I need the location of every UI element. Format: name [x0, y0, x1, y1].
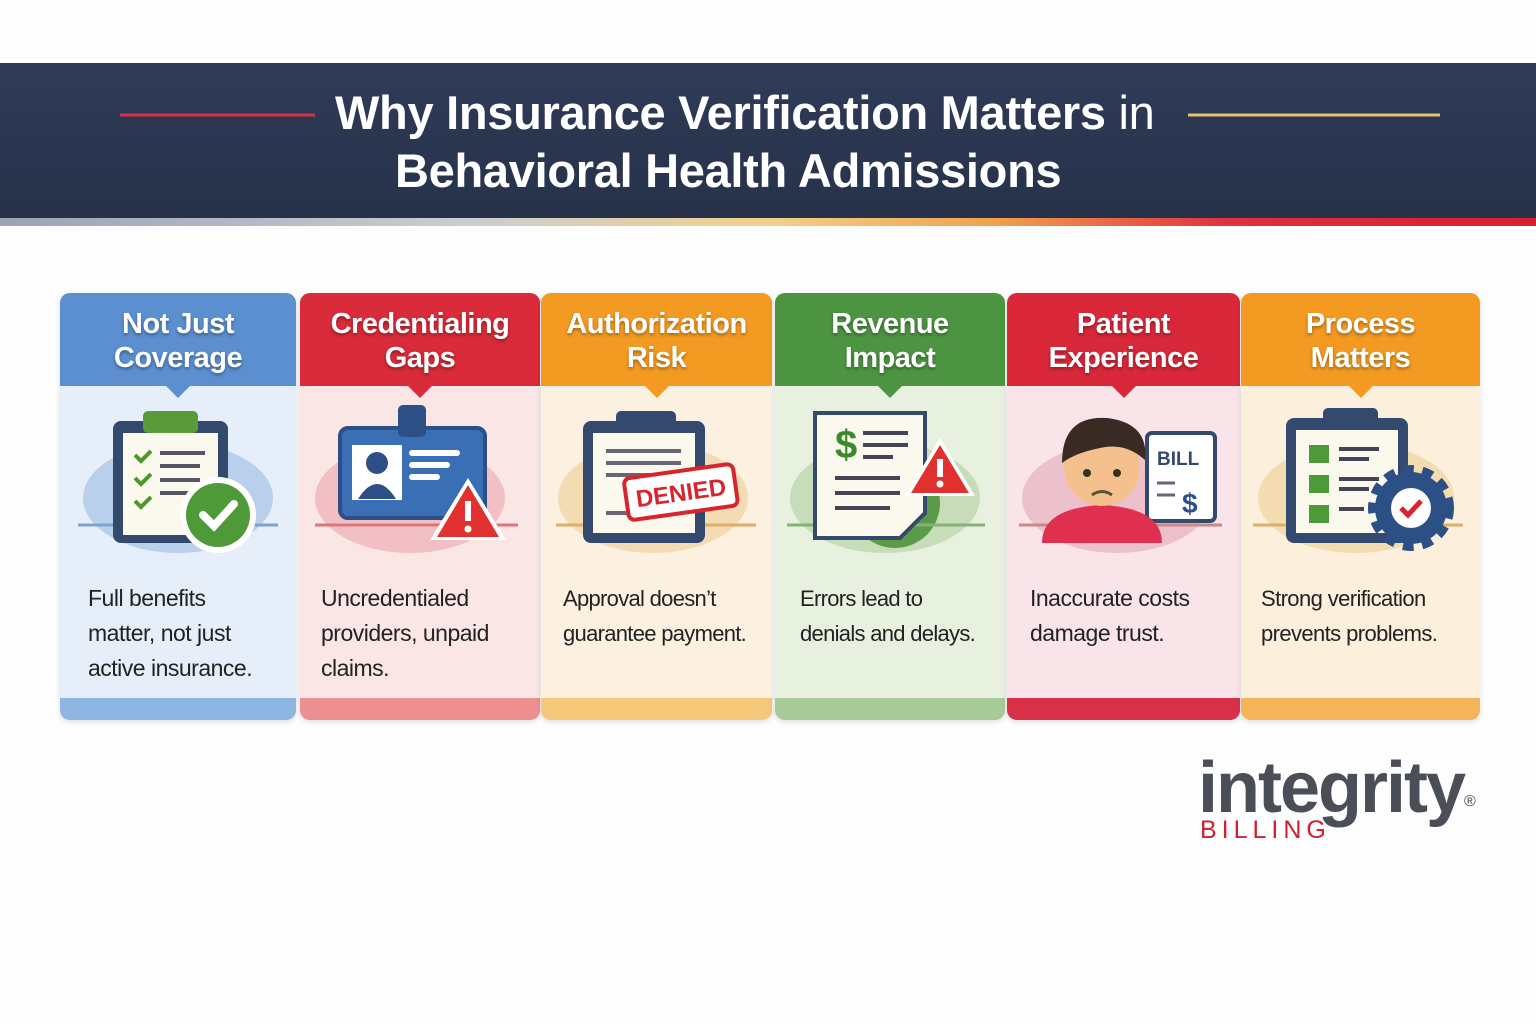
heading: Gaps — [385, 342, 455, 374]
heading — [541, 293, 772, 386]
title: Why Insurance Verification Matters in — [335, 86, 1154, 139]
text: denials and delays. — [800, 621, 975, 646]
text: Approval doesn’t — [563, 586, 716, 611]
text: Errors lead to — [800, 586, 922, 611]
panel: process matters — [1241, 293, 1480, 720]
icon: clipboard check — [78, 411, 278, 553]
text: Strong verification — [1261, 586, 1426, 611]
text: providers, unpaid — [321, 620, 489, 646]
text: prevents problems. — [1261, 621, 1437, 646]
heading: Patient — [1077, 308, 1170, 340]
text: Full benefits — [88, 585, 206, 611]
panel: revenue impact — [775, 293, 1005, 720]
panel: patient experience — [1007, 293, 1240, 720]
heading: Credentialing — [331, 308, 509, 340]
text: active insurance. — [88, 655, 252, 681]
icon: invoice warning: $ — [835, 423, 857, 467]
icon: checklist gear — [1253, 408, 1463, 553]
heading: Risk — [627, 342, 686, 374]
logo: integrity billing: integrity® — [1198, 748, 1474, 828]
title banner — [0, 63, 1536, 226]
text — [1030, 585, 1190, 646]
icon: patient with bill: BILL — [1157, 449, 1200, 470]
heading — [1241, 293, 1480, 386]
icon: clipboard denied — [556, 411, 756, 553]
heading — [775, 293, 1005, 386]
text — [88, 585, 252, 681]
icon: id badge warning — [315, 405, 518, 553]
heading — [60, 293, 296, 386]
heading: Experience — [1049, 342, 1198, 374]
decorative title lines — [120, 114, 1440, 116]
panel: credentialing gaps — [300, 293, 540, 720]
heading: Coverage — [114, 342, 242, 374]
heading: Revenue — [831, 308, 949, 340]
heading: Not Just — [122, 308, 234, 340]
heading: Matters — [1311, 342, 1410, 374]
text: Uncredentialed — [321, 585, 469, 611]
panel: authorization risk — [541, 293, 772, 720]
heading: Impact — [845, 342, 935, 374]
text — [321, 585, 489, 681]
heading: Authorization — [566, 308, 747, 340]
logo: integrity billing: BILLING — [1200, 816, 1331, 844]
heading: Process — [1306, 308, 1415, 340]
icon: patient with bill — [1019, 418, 1222, 553]
icon: patient with bill: $ — [1182, 488, 1198, 519]
panel: not just coverage — [60, 293, 296, 720]
text: damage trust. — [1030, 620, 1164, 646]
text: Inaccurate costs — [1030, 585, 1189, 611]
text: claims. — [321, 655, 389, 681]
icon: clipboard denied: DENIED — [634, 474, 728, 513]
title — [335, 86, 1154, 197]
text — [1261, 586, 1437, 646]
text — [800, 586, 975, 646]
text: guarantee payment. — [563, 621, 746, 646]
text — [563, 586, 746, 646]
title: Behavioral Health Admissions — [395, 144, 1061, 197]
heading — [300, 293, 540, 386]
text: matter, not just — [88, 620, 231, 646]
heading — [1007, 293, 1240, 386]
icon: invoice warning — [787, 411, 985, 553]
